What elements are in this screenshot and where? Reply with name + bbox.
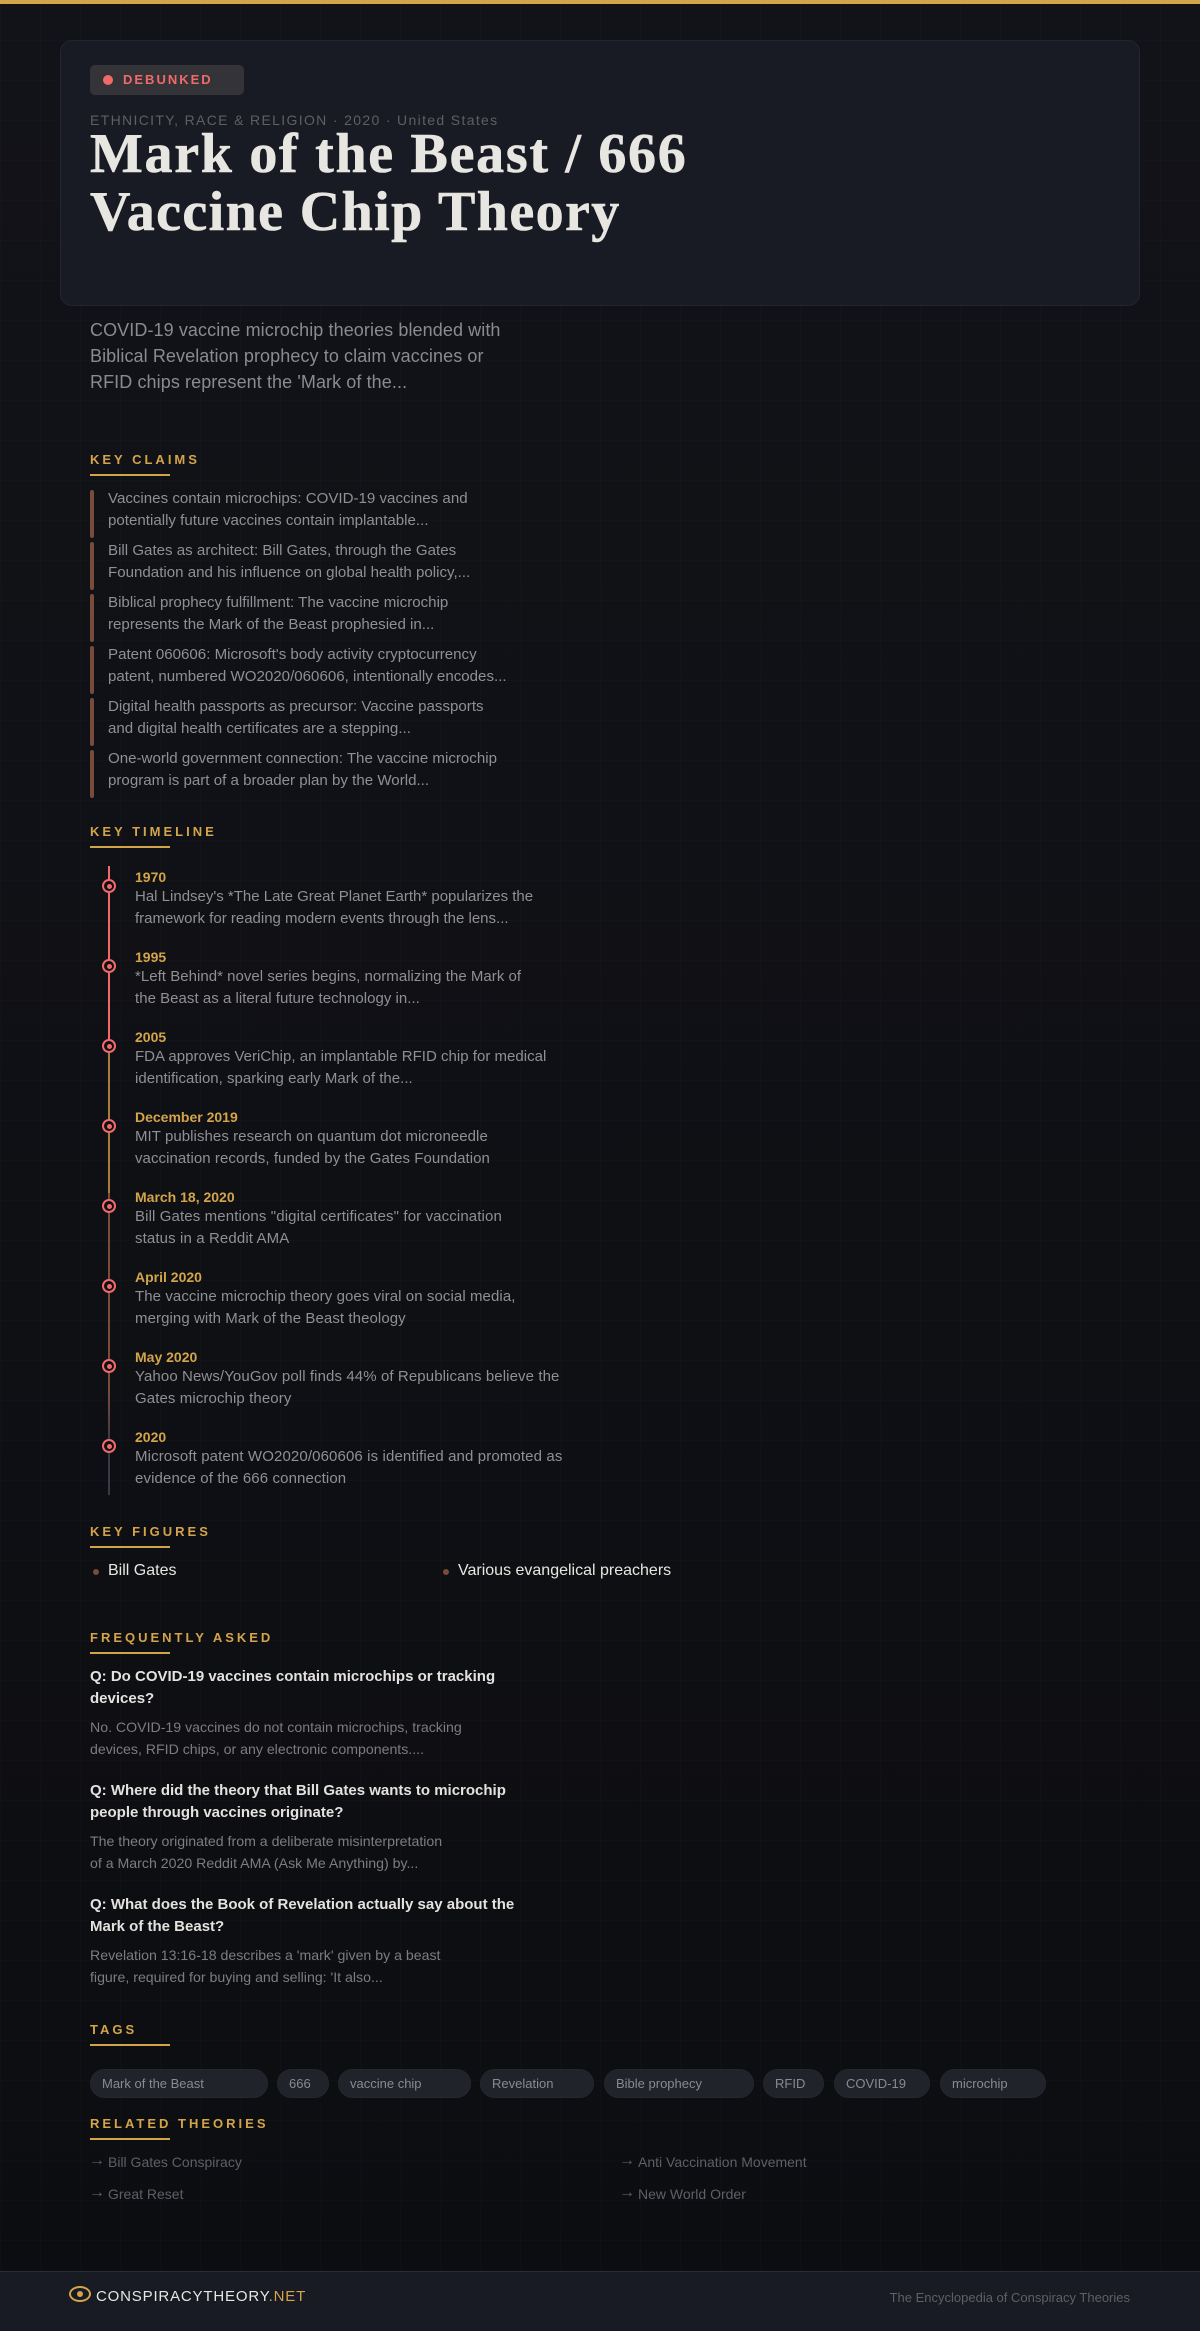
panel: hero card: [60, 40, 1140, 306]
related link: Anti Vaccination Movement: Anti Vaccination Movement: [638, 2154, 807, 2170]
tag: Mark of the Beast: Mark of the Beast: [102, 2076, 204, 2091]
tag: RFID: RFID: [775, 2076, 805, 2091]
timeline event: 2020: 2020: [135, 1429, 166, 1445]
faq question 2: [90, 1782, 506, 1821]
faq answer 3: [90, 1947, 440, 1985]
timeline event: December 2019: December 2019: [135, 1109, 238, 1125]
tag: Mark of the Beast: [90, 2069, 268, 2098]
claim 5: [90, 698, 484, 746]
related link: New World Order: New World Order: [638, 2186, 746, 2202]
claim 1: potentially future vaccines contain implantable...: [108, 512, 429, 529]
faq answer 1: devices, RFID chips, or any electronic components....: [90, 1741, 424, 1757]
related link: Great Reset: →: [89, 2184, 105, 2201]
claim 1: Vaccines contain microchips: COVID-19 vaccines and: [108, 490, 468, 507]
timeline event: May 2020: Gates microchip theory: [135, 1390, 291, 1407]
heading: frequently asked: FREQUENTLY ASKED: [90, 1630, 273, 1645]
related link: Bill Gates Conspiracy: →: [89, 2152, 105, 2169]
footer: [0, 2271, 1200, 2331]
heading: key timeline: KEY TIMELINE: [90, 824, 217, 839]
claim 3: represents the Mark of the Beast prophesied in...: [108, 616, 434, 633]
faq answer 2: [90, 1833, 442, 1871]
claim 1: [90, 490, 468, 538]
timeline event: 2005: FDA approves VeriChip, an implantable RFID chip for medical: [135, 1048, 546, 1065]
icon: eye logo: [69, 2286, 91, 2302]
figure: Various evangelical preachers: Various evangelical preachers: [458, 1562, 671, 1579]
timeline event: 1995: 1995: [135, 949, 166, 965]
related link: Anti Vaccination Movement: →: [619, 2152, 635, 2169]
timeline event: December 2019: MIT publishes research on quantum dot microneedle: [135, 1128, 488, 1145]
summary text: [90, 320, 501, 392]
timeline event: 1970: 1970: [135, 869, 166, 885]
faq answer 1: No. COVID-19 vaccines do not contain microchips, tracking: [90, 1719, 462, 1735]
claim 2: Bill Gates as architect: Bill Gates, through the Gates: [108, 542, 456, 559]
faq question 1: devices?: [90, 1690, 154, 1707]
status badge: debunked: [90, 65, 244, 95]
timeline event: 1995: the Beast as a literal future technology in...: [135, 990, 420, 1007]
timeline event: April 2020: [102, 1269, 515, 1327]
timeline event: 2005: 2005: [135, 1029, 166, 1045]
timeline event: May 2020: [102, 1349, 560, 1407]
faq answer 3: figure, required for buying and selling: 'It also...: [90, 1969, 383, 1985]
summary text: Biblical Revelation prophecy to claim vaccines or: [90, 346, 484, 366]
timeline event: 1970: [102, 869, 533, 927]
icon: status dot: [103, 75, 113, 85]
timeline event: December 2019: [102, 1109, 490, 1167]
claim 5: and digital health certificates are a stepping...: [108, 720, 411, 737]
timeline spine: [108, 866, 110, 1495]
tag: vaccine chip: vaccine chip: [350, 2076, 422, 2091]
tag: Revelation: Revelation: [492, 2076, 553, 2091]
claim 2: Foundation and his influence on global health policy,...: [108, 564, 470, 581]
timeline event: 1970: framework for reading modern events through the lens...: [135, 910, 509, 927]
faq question 3: Mark of the Beast?: [90, 1918, 224, 1935]
claim 4: [90, 646, 507, 694]
timeline event: May 2020: May 2020: [135, 1349, 197, 1365]
figure: Bill Gates: Bill Gates: [108, 1562, 176, 1579]
tag: 666: 666: [289, 2076, 311, 2091]
claim 3: Biblical prophecy fulfillment: The vaccine microchip: [108, 594, 448, 611]
timeline event: March 18, 2020: March 18, 2020: [135, 1189, 235, 1205]
heading: key figures: KEY FIGURES: [90, 1524, 211, 1539]
tag: Bible prophecy: Bible prophecy: [616, 2076, 702, 2091]
faq question 1: [90, 1668, 495, 1707]
summary text: RFID chips represent the 'Mark of the...: [90, 372, 407, 392]
faq question 2: Q: Where did the theory that Bill Gates wants to microchip: [90, 1782, 506, 1799]
timeline event: 2020: Microsoft patent WO2020/060606 is identified and promoted as: [135, 1448, 562, 1465]
tag: COVID-19: [834, 2069, 930, 2098]
title: Mark of the Beast / 666: [90, 123, 687, 185]
timeline event: 1995: *Left Behind* novel series begins, normalizing the Mark of: [135, 968, 521, 985]
tag: Bible prophecy: [604, 2069, 754, 2098]
timeline event: April 2020: The vaccine microchip theory goes viral on social media,: [135, 1288, 515, 1305]
badge label: DEBUNKED: [123, 72, 213, 87]
tag: RFID: [763, 2069, 824, 2098]
timeline event: 1995: [102, 949, 522, 1007]
faq answer 2: of a March 2020 Reddit AMA (Ask Me Anything) by...: [90, 1855, 418, 1871]
claim 3: [90, 594, 448, 642]
claim 6: program is part of a broader plan by the World...: [108, 772, 429, 789]
claim 6: [90, 750, 497, 798]
title: [90, 123, 687, 242]
timeline event: December 2019: vaccination records, funded by the Gates Foundation: [135, 1150, 490, 1167]
tag: microchip: microchip: [952, 2076, 1008, 2091]
claim 4: patent, numbered WO2020/060606, intentionally encodes...: [108, 668, 507, 685]
timeline event: March 18, 2020: Bill Gates mentions "digital certificates" for vaccination: [135, 1208, 502, 1225]
tag: vaccine chip: [338, 2069, 471, 2098]
heading: key claims: KEY CLAIMS: [90, 452, 200, 467]
tag: microchip: [940, 2069, 1046, 2098]
related link: New World Order: →: [619, 2184, 635, 2201]
timeline event: March 18, 2020: status in a Reddit AMA: [135, 1230, 289, 1247]
top accent bar: [0, 0, 1200, 4]
heading: tags: TAGS: [90, 2022, 137, 2037]
title: Vaccine Chip Theory: [90, 180, 621, 242]
category and meta line: ETHNICITY, RACE & RELIGION · 2020 · United States: [90, 112, 499, 128]
faq question 3: [90, 1896, 514, 1935]
faq answer 3: Revelation 13:16-18 describes a 'mark' given by a beast: [90, 1947, 440, 1963]
tag: COVID-19: COVID-19: [846, 2076, 906, 2091]
timeline event: March 18, 2020: [102, 1189, 502, 1247]
heading: related theories: RELATED THEORIES: [90, 2116, 268, 2131]
faq question 2: people through vaccines originate?: [90, 1804, 343, 1821]
faq answer 2: The theory originated from a deliberate misinterpretation: [90, 1833, 442, 1849]
summary text: COVID-19 vaccine microchip theories blended with: [90, 320, 501, 340]
faq answer 1: [90, 1719, 462, 1757]
timeline event: May 2020: Yahoo News/YouGov poll finds 44% of Republicans believe the: [135, 1368, 560, 1385]
timeline event: April 2020: April 2020: [135, 1269, 202, 1285]
faq question 3: Q: What does the Book of Revelation actually say about the: [90, 1896, 514, 1913]
tag: 666: [277, 2069, 329, 2098]
claim 6: One-world government connection: The vaccine microchip: [108, 750, 497, 767]
claim 5: Digital health passports as precursor: Vaccine passports: [108, 698, 484, 715]
timeline event: 2020: [102, 1429, 562, 1487]
footer tagline: The Encyclopedia of Conspiracy Theories: [890, 2290, 1130, 2305]
claim 2: [90, 542, 470, 590]
faq question 1: Q: Do COVID-19 vaccines contain microchips or tracking: [90, 1668, 495, 1685]
claim 4: Patent 060606: Microsoft's body activity cryptocurrency: [108, 646, 477, 663]
footer brand: CONSPIRACYTHEORY.NET: [96, 2288, 306, 2305]
timeline event: April 2020: merging with Mark of the Beast theology: [135, 1310, 406, 1327]
timeline event: 2005: [102, 1029, 546, 1087]
tag: Revelation: [480, 2069, 594, 2098]
related link: Bill Gates Conspiracy: Bill Gates Conspiracy: [108, 2154, 242, 2170]
timeline event: 2005: identification, sparking early Mark of the...: [135, 1070, 413, 1087]
timeline event: 2020: evidence of the 666 connection: [135, 1470, 346, 1487]
related link: Great Reset: Great Reset: [108, 2186, 183, 2202]
timeline event: 1970: Hal Lindsey's *The Late Great Planet Earth* popularizes the: [135, 888, 533, 905]
